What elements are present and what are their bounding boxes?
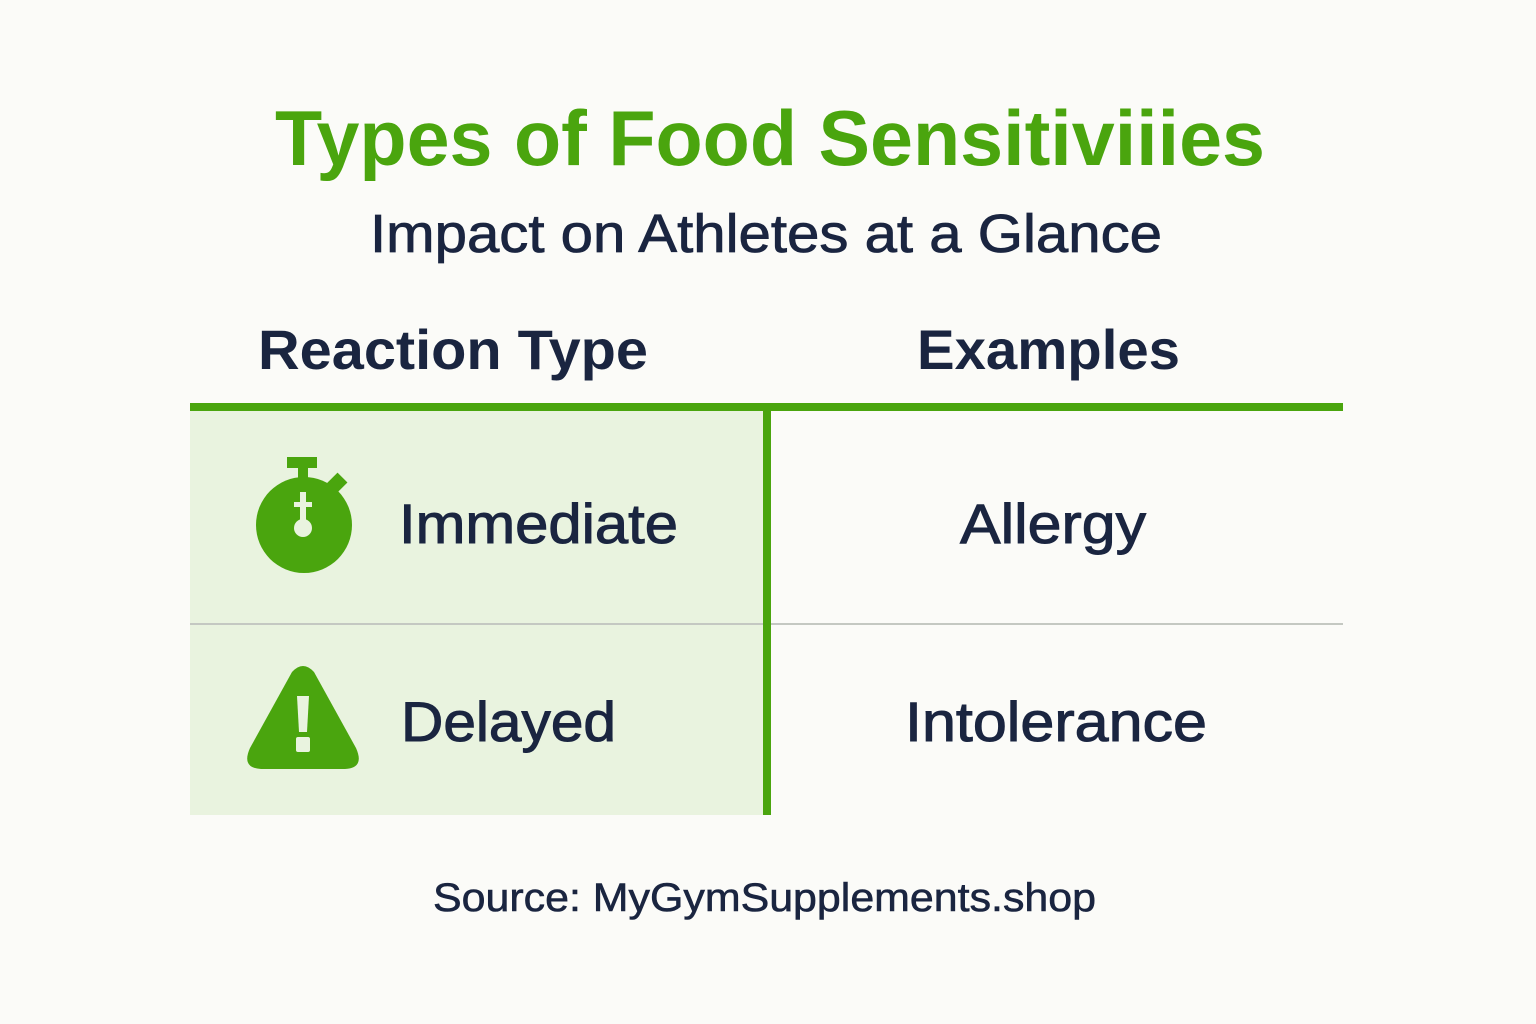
row2 reaction: Delayed: Delayed	[401, 690, 616, 753]
source: Source: MyGymSupplements.shop	[433, 876, 1096, 920]
row2 example: Intolerance: Intolerance	[905, 690, 1207, 753]
left column shading	[190, 410, 765, 815]
title: Types of Food Sensitiviiies	[275, 94, 1265, 182]
row1 reaction: Immediate: Immediate	[399, 492, 678, 555]
table	[190, 318, 1343, 815]
icon: warning triangle	[247, 666, 359, 769]
row1 example: Allergy: Allergy	[960, 492, 1146, 555]
subtitle: Impact on Athletes at a Glance	[370, 204, 1162, 264]
header: Reaction Type: Reaction Type	[258, 318, 648, 381]
header: Examples: Examples	[917, 318, 1180, 381]
icon: stopwatch	[256, 457, 352, 573]
